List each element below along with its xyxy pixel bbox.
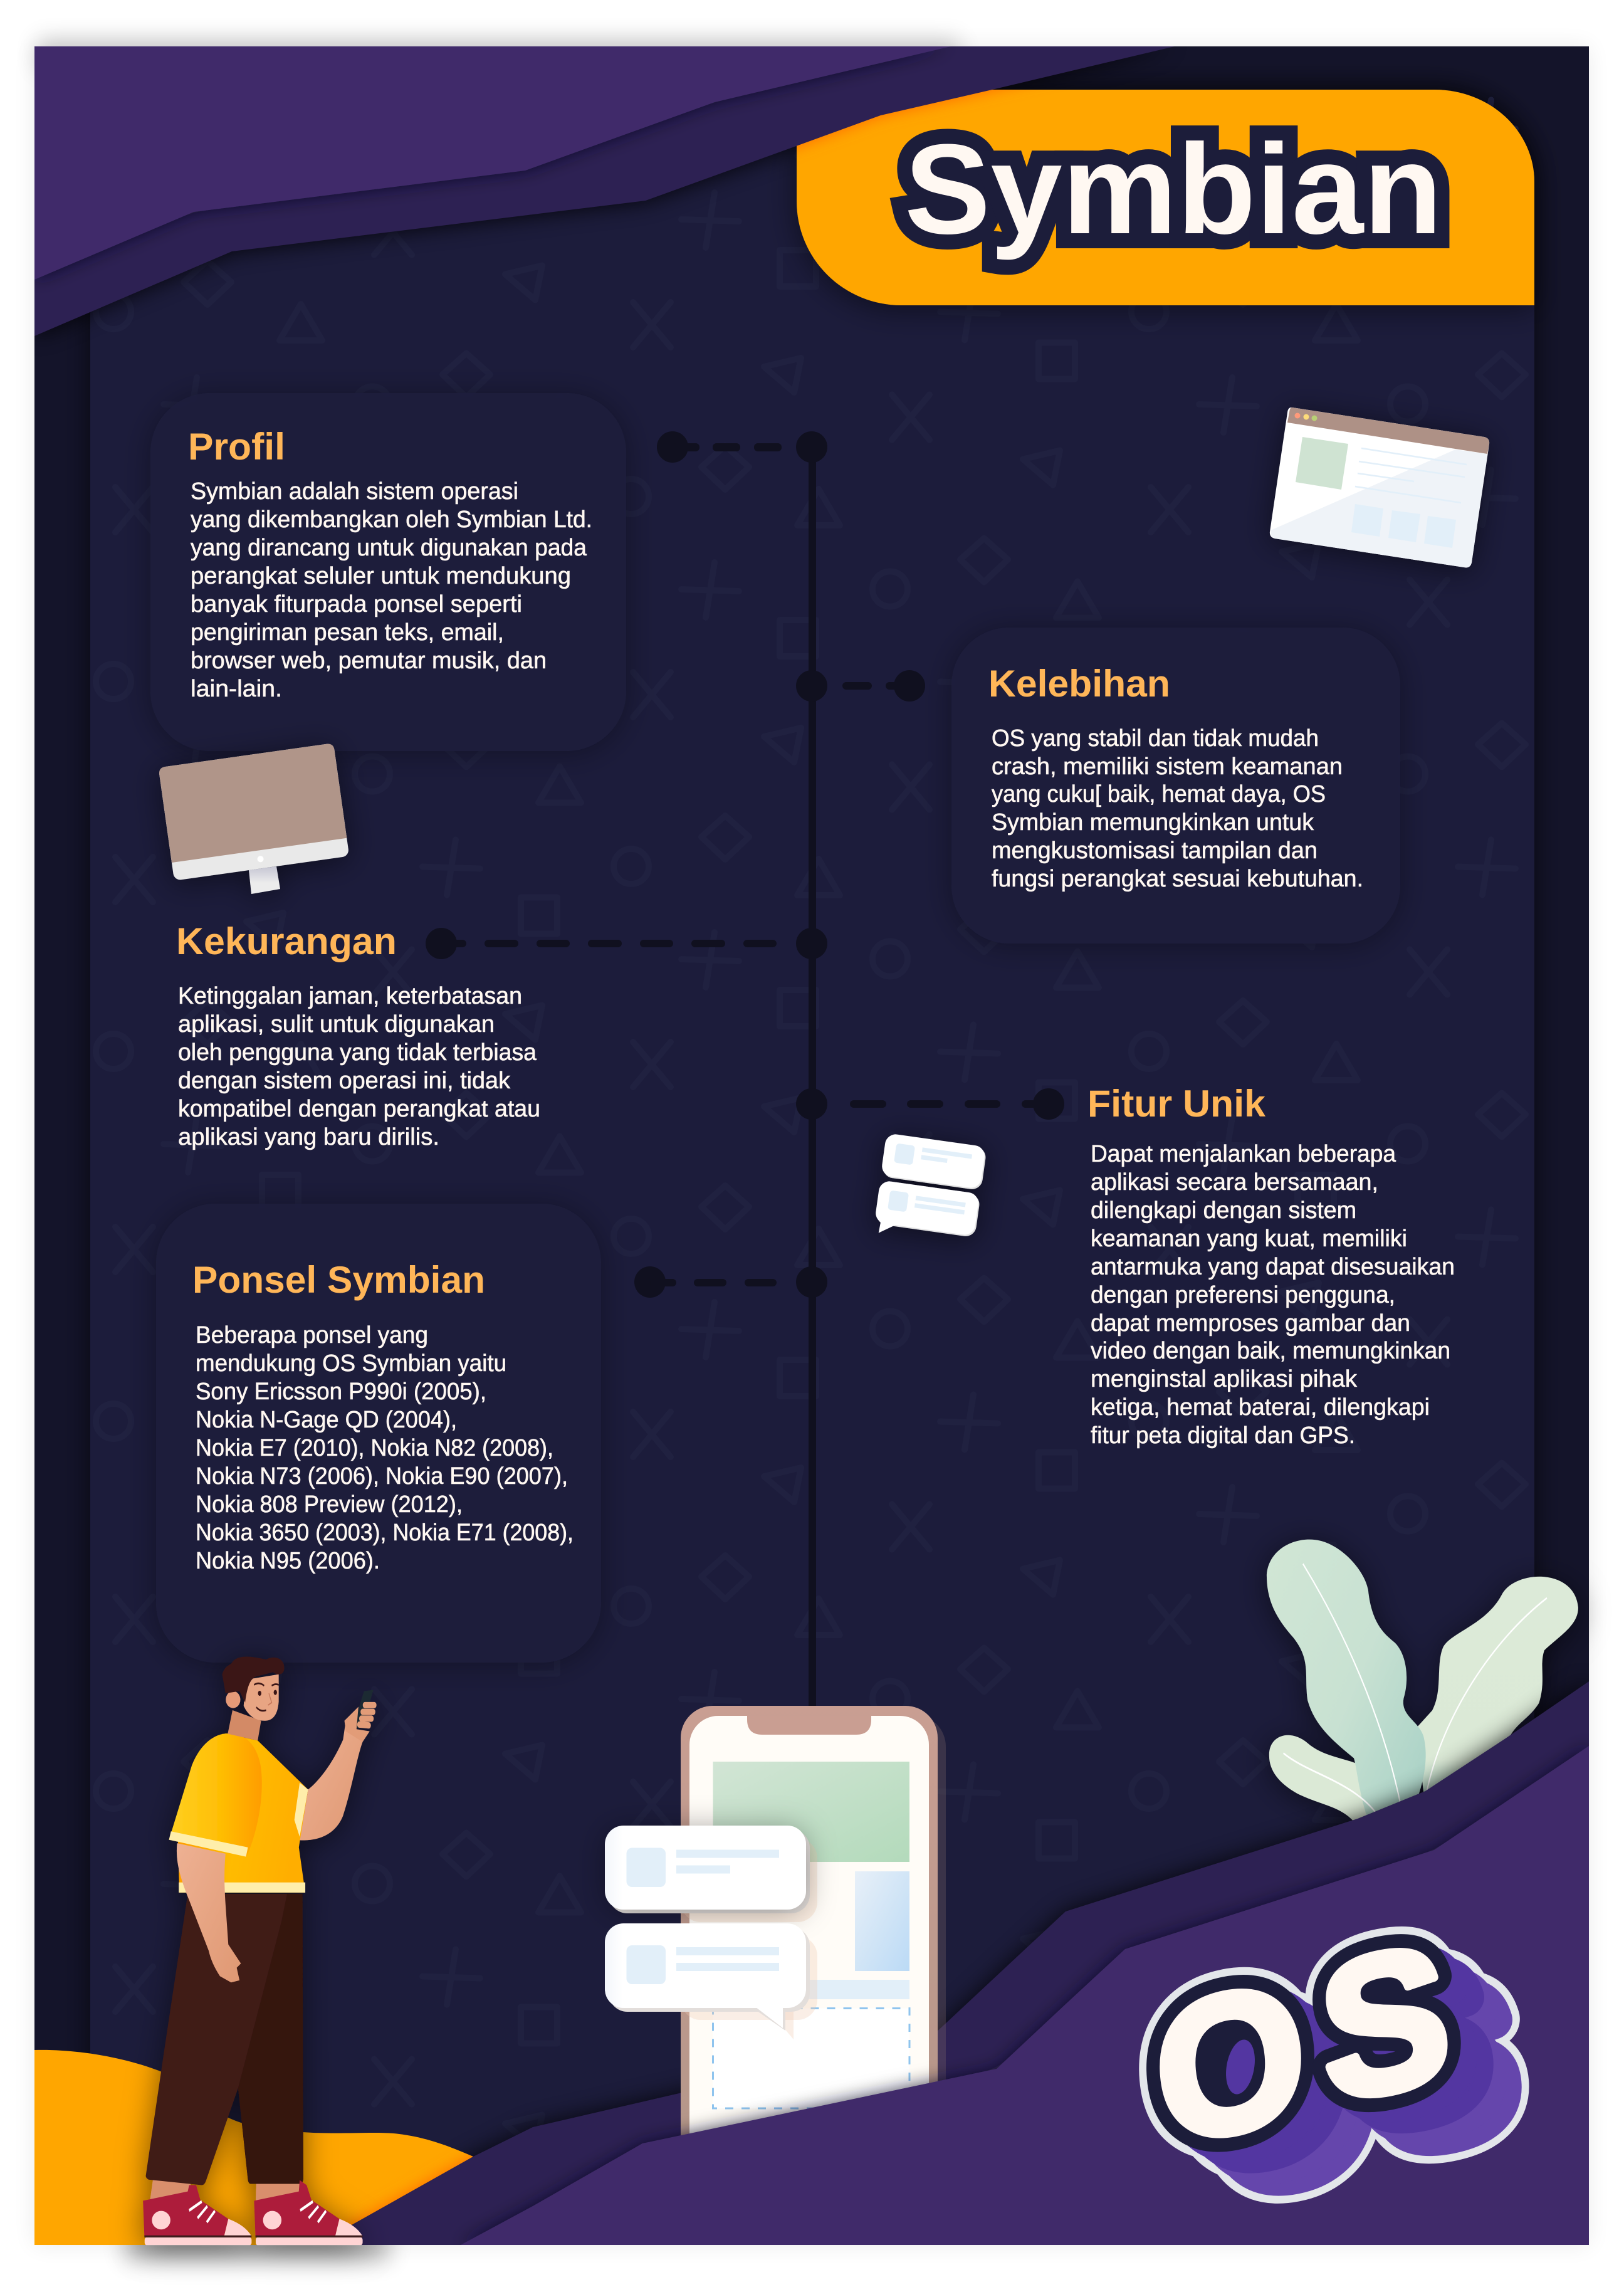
text: Kekurangan body bbox=[178, 983, 540, 1150]
text: Kelebihan body: fungsi perangkat sesuai kebutuhan. bbox=[992, 866, 1363, 892]
chat bubble: upper bbox=[605, 1826, 817, 1922]
icon: browser window bbox=[1270, 407, 1489, 567]
sleeve bbox=[169, 1733, 262, 1857]
title banner bbox=[788, 90, 1534, 318]
OS logo: O bbox=[1147, 1940, 1314, 2186]
bottom dark purple shadow bbox=[461, 1684, 1585, 2157]
text: Profil body: perangkat seluler untuk mendukung bbox=[191, 563, 571, 589]
text: Kelebihan body: OS yang stabil dan tidak mudah bbox=[992, 725, 1319, 752]
text: Ponsel Symbian body: Nokia 808 Preview (2012), bbox=[196, 1491, 463, 1518]
text: Ponsel Symbian body: Sony Ericsson P990i (2005), bbox=[196, 1379, 486, 1405]
text: Fitur Unik body: antarmuka yang dapat disesuaikan bbox=[1091, 1254, 1455, 1280]
OS logo: O bbox=[1180, 1961, 1347, 2207]
phone and hand bbox=[353, 1690, 374, 1728]
heading: Fitur Unik: Fitur Unik bbox=[1087, 1083, 1266, 1125]
text: Ponsel Symbian body: Nokia N73 (2006), Nokia E90 (2007), bbox=[196, 1463, 568, 1490]
OS logo: O bbox=[1193, 1972, 1361, 2219]
OS logo: O bbox=[1147, 1940, 1314, 2186]
OS logo: O bbox=[1147, 1940, 1314, 2186]
shoes bbox=[143, 2180, 339, 2236]
panel: Ponsel Symbian bbox=[156, 1204, 601, 1663]
character: man holding phone bbox=[143, 1656, 374, 2245]
text: Kekurangan body: dengan sistem operasi ini, tidak bbox=[178, 1068, 511, 1094]
top purple dark polygon bbox=[34, 46, 1175, 336]
OS logo: S bbox=[1344, 1923, 1490, 2165]
ear bbox=[226, 1691, 240, 1708]
bottom dark purple polygon bbox=[313, 1681, 1589, 2245]
text: Fitur Unik body: aplikasi secara bersamaan, bbox=[1091, 1169, 1378, 1196]
top purple light polygon bbox=[34, 46, 951, 280]
heading: Kekurangan: Kekurangan bbox=[176, 920, 397, 962]
text: Kekurangan body: kompatibel dengan perangkat atau bbox=[178, 1096, 540, 1122]
text: Kelebihan body bbox=[992, 725, 1363, 892]
text: Fitur Unik body: dilengkapi dengan sistem bbox=[1091, 1197, 1356, 1224]
text: Kelebihan body: mengkustomisasi tampilan dan bbox=[992, 838, 1318, 864]
chat bubble: lower bbox=[605, 1923, 817, 2039]
section: Fitur Unik bbox=[1087, 1083, 1455, 1449]
OS logo bbox=[1146, 1902, 1519, 2230]
OS logo: S bbox=[1312, 1902, 1458, 2144]
text: Ponsel Symbian body bbox=[196, 1322, 574, 1574]
OS logo: S bbox=[1312, 1902, 1458, 2144]
text: Ponsel Symbian body: Nokia 3650 (2003), Nokia E71 (2008), bbox=[196, 1520, 574, 1546]
OS logo: S bbox=[1328, 1913, 1474, 2155]
right arm bbox=[300, 1721, 363, 1841]
text: Ponsel Symbian body: Nokia N-Gage QD (2004), bbox=[196, 1407, 457, 1433]
text: Kelebihan body: Symbian memungkinkan untuk bbox=[992, 809, 1314, 836]
text: Fitur Unik body: dapat memproses gambar dan bbox=[1091, 1310, 1410, 1337]
OS logo: S bbox=[1373, 1946, 1519, 2188]
text: Profil body: yang dikembangkan oleh Symbian Ltd. bbox=[191, 507, 592, 533]
text: Kelebihan body: yang cuku[ baik, hemat daya, OS bbox=[992, 781, 1326, 807]
text: Kekurangan body: aplikasi, sulit untuk digunakan bbox=[178, 1011, 495, 1038]
face bbox=[258, 1691, 261, 1696]
OS logo: O bbox=[1163, 1950, 1331, 2197]
text: Profil body: pengiriman pesan teks, email, bbox=[191, 619, 504, 646]
OS logo: S bbox=[1358, 1935, 1504, 2177]
text: Profil body: banyak fiturpada ponsel seperti bbox=[191, 591, 522, 618]
OS logo: S bbox=[1312, 1902, 1458, 2144]
OS logo: S bbox=[1344, 1923, 1490, 2165]
text: Kelebihan body: crash, memiliki sistem keamanan bbox=[992, 754, 1343, 780]
top purple shadow layer bbox=[34, 46, 1175, 336]
bottom light purple polygon bbox=[461, 1746, 1589, 2245]
heading: Ponsel Symbian: Ponsel Symbian bbox=[192, 1259, 485, 1301]
head bbox=[244, 1674, 279, 1721]
timeline with connector dots and dashes bbox=[426, 431, 1064, 1713]
text: Profil body: lain-lain. bbox=[191, 676, 282, 702]
text: Ponsel Symbian body: mendukung OS Symbian yaitu bbox=[196, 1350, 506, 1377]
OS logo: O bbox=[1208, 1984, 1375, 2230]
text: Fitur Unik body: keamanan yang kuat, memiliki bbox=[1091, 1226, 1407, 1252]
OS logo: O bbox=[1208, 1984, 1375, 2230]
title: Symbian: Symbian bbox=[904, 118, 1442, 261]
text: Ponsel Symbian body: Nokia N95 (2006). bbox=[196, 1548, 380, 1574]
trousers bbox=[146, 1894, 303, 2185]
heading: Kelebihan: Kelebihan bbox=[988, 663, 1170, 705]
left arm bbox=[177, 1843, 241, 1982]
text: Profil body bbox=[191, 478, 592, 702]
text: Kekurangan body: oleh pengguna yang tidak terbiasa bbox=[178, 1039, 537, 1066]
section: Kekurangan bbox=[176, 920, 540, 1150]
text: Ponsel Symbian body: Nokia E7 (2010), Nokia N82 (2008), bbox=[196, 1435, 553, 1461]
hair bbox=[222, 1656, 285, 1703]
text: Fitur Unik body: fitur peta digital dan GPS. bbox=[1091, 1422, 1355, 1449]
text: Fitur Unik body: ketiga, hemat baterai, dilengkapi bbox=[1091, 1394, 1430, 1421]
text: Fitur Unik body: video dengan baik, memungkinkan bbox=[1091, 1338, 1450, 1364]
text: Kekurangan body: Ketinggalan jaman, keterbatasan bbox=[178, 983, 522, 1009]
icon: chat bubbles bbox=[873, 1133, 987, 1246]
ankles bbox=[150, 2177, 300, 2200]
icon: desktop monitor bbox=[159, 743, 349, 894]
text: Kekurangan body: aplikasi yang baru dirilis. bbox=[178, 1124, 439, 1150]
phone mockup bbox=[681, 1706, 946, 2182]
plant leaves bbox=[1267, 1540, 1578, 1826]
panel: Kelebihan bbox=[951, 628, 1400, 944]
text: Fitur Unik body: menginstal aplikasi pihak bbox=[1091, 1366, 1358, 1392]
OS logo: S bbox=[1373, 1946, 1519, 2188]
text: Fitur Unik body: dengan preferensi pengguna, bbox=[1091, 1282, 1395, 1308]
heading: Profil: Profil bbox=[188, 426, 285, 468]
text: Fitur Unik body: Dapat menjalankan beberapa bbox=[1091, 1141, 1396, 1167]
OS logo: O bbox=[1180, 1961, 1347, 2207]
text: Profil body: yang dirancang untuk digunakan pada bbox=[191, 535, 587, 561]
text: Ponsel Symbian body: Beberapa ponsel yang bbox=[196, 1322, 428, 1348]
panel: Profil bbox=[150, 393, 626, 751]
neck bbox=[228, 1710, 261, 1740]
orange hill bbox=[34, 2050, 533, 2245]
text: Fitur Unik body bbox=[1091, 1141, 1455, 1449]
text: Profil body: browser web, pemutar musik, dan bbox=[191, 648, 547, 674]
text: Profil body: Symbian adalah sistem operasi bbox=[191, 478, 518, 505]
torso bbox=[178, 1733, 308, 1893]
